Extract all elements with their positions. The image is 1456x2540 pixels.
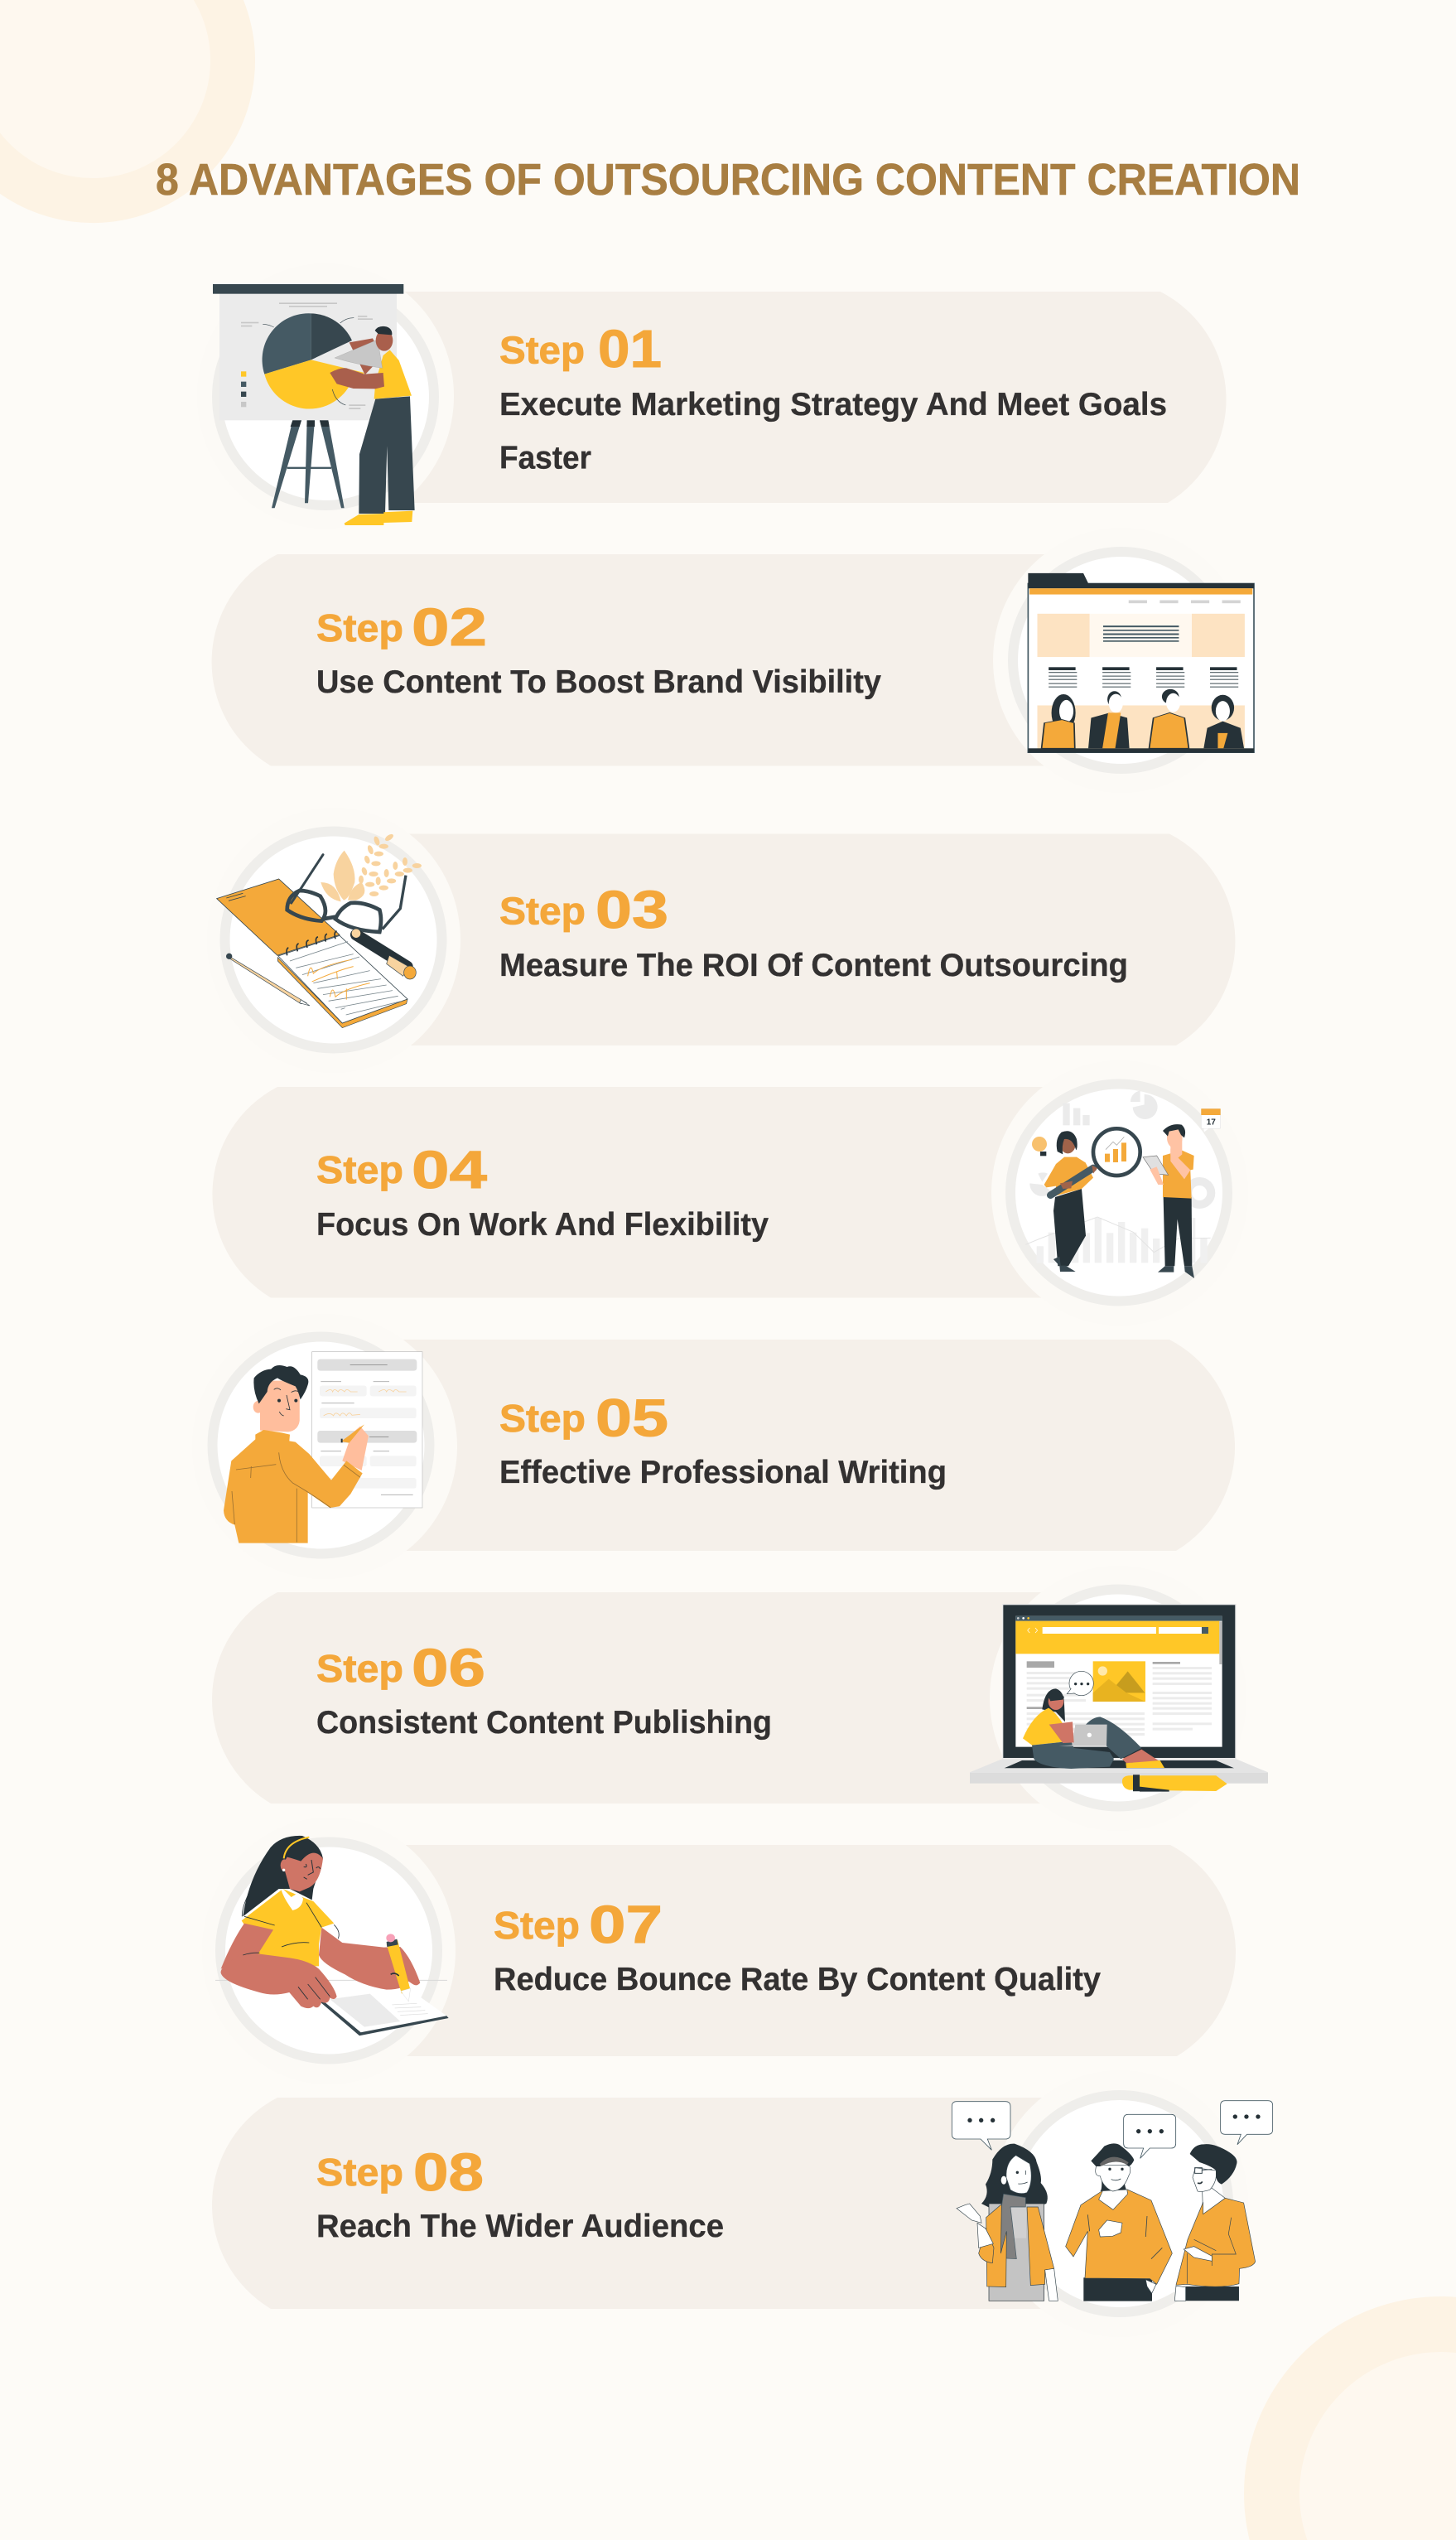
panel: step 08 xyxy=(212,2070,1273,2337)
step description: Execute Marketing Strategy And Meet Goals xyxy=(499,387,1167,423)
panel: step 06 xyxy=(212,1566,1268,1831)
title: 8 ADVANTAGES OF OUTSOURCING CONTENT CREATION xyxy=(156,155,1300,205)
step number: 04 xyxy=(412,1140,488,1200)
step number: 06 xyxy=(412,1638,485,1697)
panel: step 04 xyxy=(212,1060,1248,1326)
step description: Use Content To Boost Brand Visibility xyxy=(316,664,882,700)
step description: Focus On Work And Flexibility xyxy=(316,1207,769,1243)
step 05 banner xyxy=(331,1340,1235,1551)
icon: analysts with magnifying glass xyxy=(1025,1091,1221,1278)
step number: 02 xyxy=(412,597,487,657)
icon: three people talking xyxy=(952,2101,1273,2301)
step 03 banner xyxy=(331,833,1235,1045)
step number: 07 xyxy=(589,1895,663,1954)
step description xyxy=(499,387,1167,476)
step description: Consistent Content Publishing xyxy=(316,1705,772,1741)
panel: step 01 xyxy=(197,263,1227,529)
step 01 banner xyxy=(323,292,1227,503)
panel: step 07 xyxy=(202,1818,1236,2084)
step number: 08 xyxy=(413,2142,484,2202)
icon: web page with team xyxy=(1028,573,1254,753)
step label: Step xyxy=(316,1148,403,1191)
step label: Step xyxy=(316,606,403,649)
step label: Step xyxy=(316,1647,403,1690)
step number: 01 xyxy=(598,319,662,379)
icon: man filling a form xyxy=(224,1352,422,1543)
step description: Effective Professional Writing xyxy=(499,1455,947,1490)
step description: Reach The Wider Audience xyxy=(316,2209,724,2244)
step description: Measure The ROI Of Content Outsourcing xyxy=(499,948,1128,983)
icon: woman writing in a notebook xyxy=(215,1836,449,2035)
step 02 banner xyxy=(212,554,1118,765)
step 06 banner xyxy=(212,1592,1118,1804)
step label: Step xyxy=(499,1397,586,1440)
panel: step 05 xyxy=(192,1314,1235,1579)
icon: notepad, glasses and pen xyxy=(217,833,422,1028)
step label: Step xyxy=(499,890,586,933)
step description: Reduce Bounce Rate By Content Quality xyxy=(494,1962,1102,1997)
step 04 banner xyxy=(212,1087,1118,1297)
step label: Step xyxy=(316,2151,403,2194)
step 07 banner xyxy=(331,1845,1236,2056)
icon: presenter with pie chart xyxy=(213,284,415,525)
panel: step 03 xyxy=(207,808,1235,1073)
panel: step 02 xyxy=(212,528,1254,793)
step 08 banner xyxy=(212,2098,1118,2309)
calendar date: 17 xyxy=(1207,1118,1216,1127)
step label: Step xyxy=(499,329,585,372)
step number: 03 xyxy=(595,880,668,939)
step number: 05 xyxy=(595,1388,668,1448)
step label: Step xyxy=(494,1904,580,1947)
icon: woman on a laptop screen xyxy=(970,1605,1268,1792)
step description: Faster xyxy=(499,441,591,476)
